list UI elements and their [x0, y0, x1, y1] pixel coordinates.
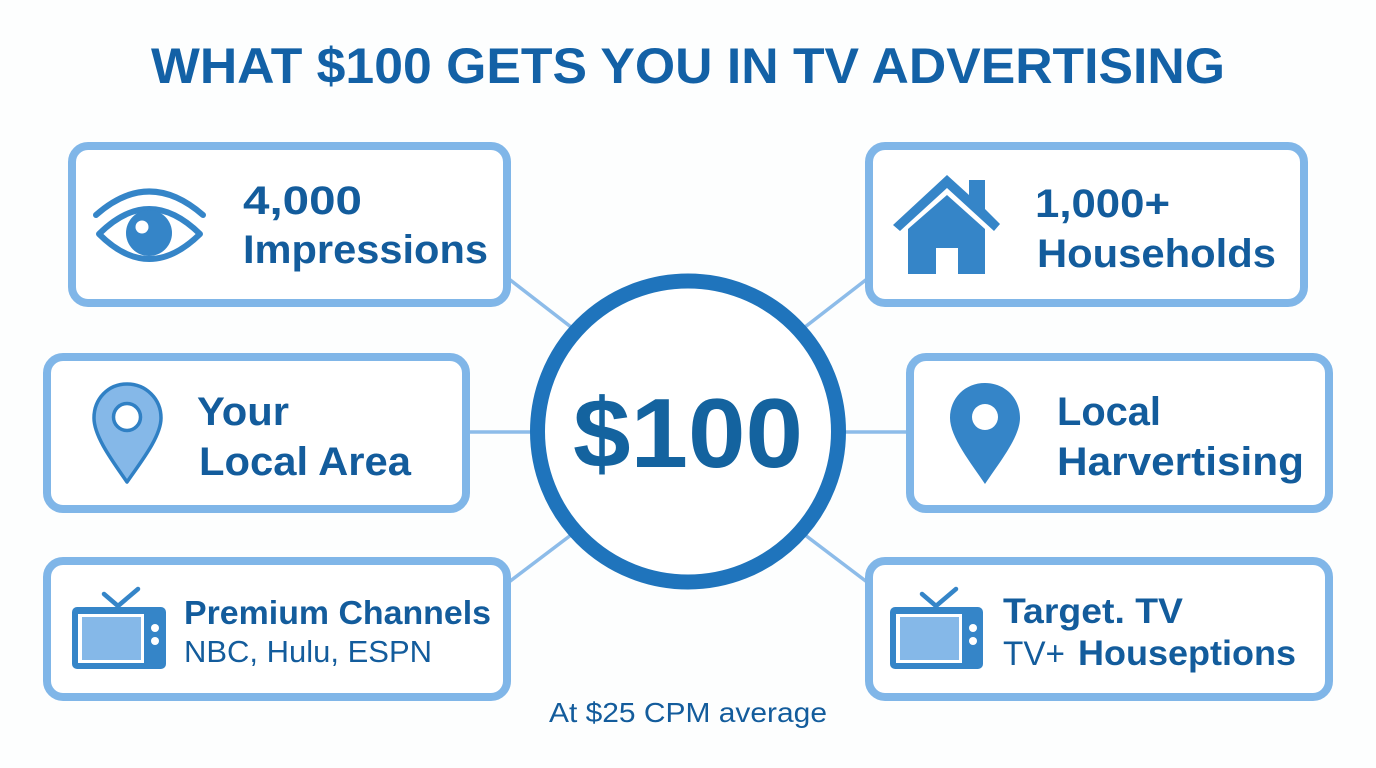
text: TV+: TV+: [1003, 635, 1065, 673]
panel: premium channels: [47, 561, 507, 697]
text: $100: $100: [573, 378, 803, 488]
panel: local harvertising: [910, 357, 1329, 509]
icon: solid map pin: [950, 383, 1020, 484]
text: Households: Households: [1037, 232, 1276, 276]
connector: target TV to center: [805, 535, 867, 582]
panel: target TV: [869, 561, 1329, 697]
text: Your: Your: [197, 390, 289, 434]
icon: television: [890, 589, 983, 669]
text: NBC, Hulu, ESPN: NBC, Hulu, ESPN: [184, 634, 432, 669]
text: Local Area: Local Area: [199, 440, 412, 484]
icon: television: [72, 589, 166, 669]
text: Local: Local: [1057, 390, 1161, 434]
text: 1,000+: 1,000+: [1035, 182, 1170, 226]
panel: your local area: [47, 357, 466, 509]
text: Houseptions: Houseptions: [1078, 634, 1296, 673]
icon: eye: [96, 192, 203, 259]
connector: premium channels to center: [509, 535, 571, 582]
title: WHAT $100 GETS YOU IN TV ADVERTISING: [151, 38, 1225, 94]
text: Premium Channels: Premium Channels: [184, 594, 491, 631]
panel: 1,000+ households: [869, 146, 1304, 303]
center circle: $100: [538, 281, 838, 582]
connector: impressions to center: [509, 279, 571, 327]
text: Harvertising: Harvertising: [1057, 440, 1304, 484]
text: Impressions: Impressions: [243, 228, 488, 272]
footnote: At $25 CPM average: [549, 697, 827, 728]
connector: households to center: [805, 279, 867, 327]
connector: local area to center: [468, 430, 532, 434]
panel: 4,000 impressions: [72, 146, 507, 303]
text: 4,000: 4,000: [243, 179, 362, 223]
connector: local harvertising to center: [844, 430, 908, 434]
icon: house: [893, 175, 1000, 274]
text: Target. TV: Target. TV: [1003, 592, 1184, 631]
icon: light map pin: [94, 384, 161, 482]
